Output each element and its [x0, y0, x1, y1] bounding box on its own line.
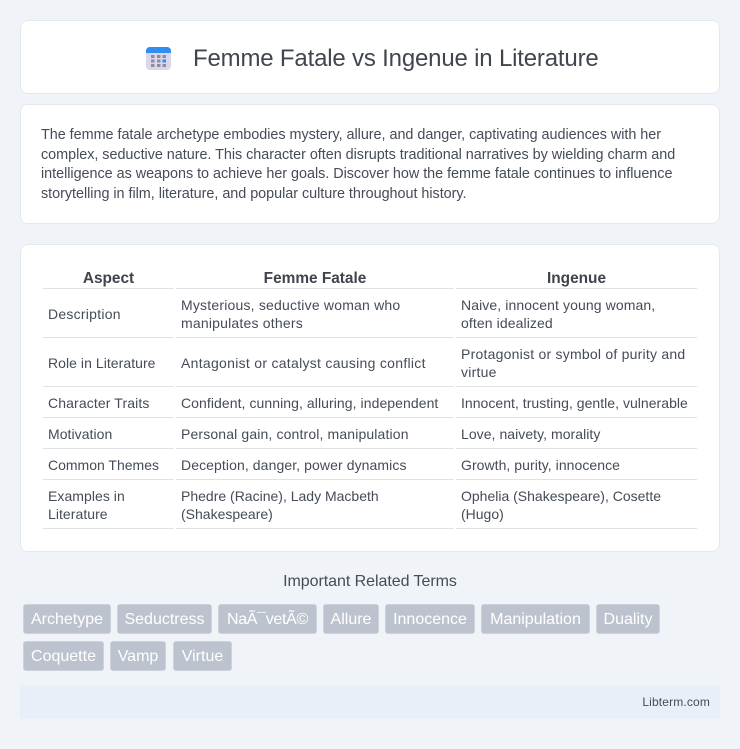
comparison table: Literature: [48, 506, 108, 522]
comparison table: often idealized: [461, 315, 553, 331]
icon: calendar: [146, 47, 171, 70]
comparison table: Antagonist or catalyst causing conflict: [181, 355, 426, 371]
comparison table: Love, naivety, morality: [461, 426, 600, 442]
table card: [20, 244, 720, 552]
related term tags: Archetype: [31, 611, 103, 628]
comparison table: Protagonist or symbol of purity and: [461, 346, 685, 362]
comparison table: Aspect: [83, 270, 134, 287]
comparison table: (Shakespeare): [181, 506, 273, 522]
intro text: intelligence as weapons to achieve her goals. Discover how the femme fatale continues to influence: [41, 166, 672, 182]
comparison table: manipulates others: [181, 315, 303, 331]
comparison table: Examples in: [48, 488, 125, 504]
intro text: [41, 127, 675, 202]
related term tags: [23, 604, 660, 671]
intro text: storytelling in film, literature, and popular culture throughout history.: [41, 186, 466, 202]
footer credit: Libterm.com: [642, 695, 710, 709]
comparison table: Naive, innocent young woman,: [461, 297, 655, 313]
comparison table: Innocent, trusting, gentle, vulnerable: [461, 395, 688, 411]
related term tags: Allure: [331, 611, 371, 628]
related term tags: Innocence: [393, 611, 467, 628]
related terms heading: Important Related Terms: [283, 573, 457, 590]
related term tags: NaÃ¯vetÃ©: [227, 611, 308, 628]
comparison table: virtue: [461, 364, 497, 380]
comparison table: Femme Fatale: [264, 270, 366, 287]
comparison table: Role in Literature: [48, 355, 156, 371]
comparison table: Deception, danger, power dynamics: [181, 457, 407, 473]
related term tags: Seductress: [124, 611, 205, 628]
comparison table: Personal gain, control, manipulation: [181, 426, 409, 442]
comparison table: Confident, cunning, alluring, independent: [181, 395, 438, 411]
comparison table: Ingenue: [547, 270, 606, 287]
comparison table: Description: [48, 306, 121, 322]
comparison table: Mysterious, seductive woman who: [181, 297, 400, 313]
title card: [20, 20, 720, 94]
intro card: [20, 104, 720, 224]
related term tags: Virtue: [182, 648, 223, 665]
related term tags: Duality: [604, 611, 652, 628]
comparison table: Ophelia (Shakespeare), Cosette: [461, 488, 661, 504]
comparison table: [43, 270, 697, 529]
title: Femme Fatale vs Ingenue in Literature: [193, 45, 599, 72]
related term tags: Vamp: [118, 648, 158, 665]
comparison table: (Hugo): [461, 506, 504, 522]
comparison table: Growth, purity, innocence: [461, 457, 620, 473]
intro text: complex, seductive nature. This character often disrupts traditional narratives by wielding charm and: [41, 146, 675, 162]
footer bar: [20, 685, 720, 719]
comparison table: Phedre (Racine), Lady Macbeth: [181, 488, 379, 504]
intro text: The femme fatale archetype embodies mystery, allure, and danger, captivating audiences with her: [41, 127, 661, 143]
comparison table: Common Themes: [48, 457, 159, 473]
related term tags: Coquette: [31, 648, 96, 665]
comparison table: Character Traits: [48, 395, 150, 411]
related term tags: Manipulation: [490, 611, 581, 628]
comparison table: Motivation: [48, 426, 112, 442]
